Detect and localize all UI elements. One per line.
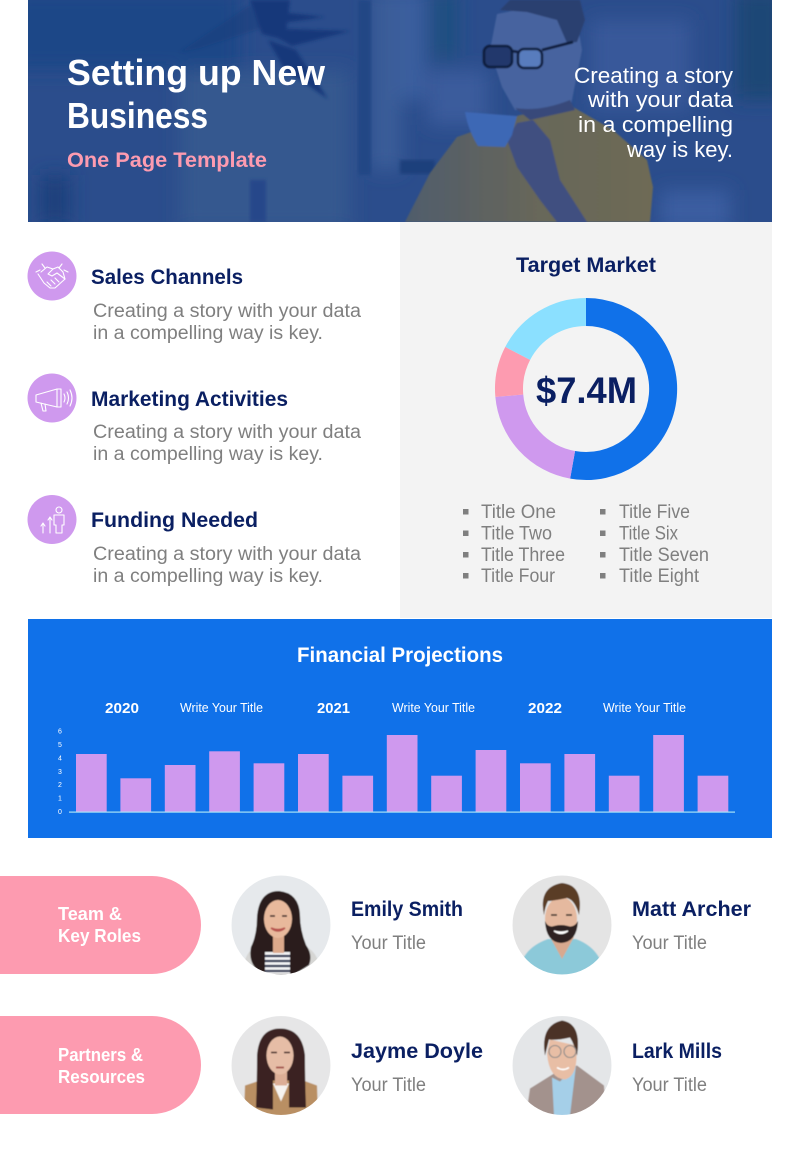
bar chart: 3 <box>58 769 62 776</box>
portrait: Matt Archer <box>512 875 612 975</box>
banner photo background <box>10 0 785 230</box>
pill: partners label: Resources <box>58 1067 145 1087</box>
portrait: Jayme Doyle <box>231 1016 331 1116</box>
pill: team label: Team & <box>58 904 122 924</box>
bar chart: 5 <box>58 742 62 749</box>
name: Emily Smith <box>351 898 463 954</box>
name: Lark Mills: Your Title <box>632 1075 707 1096</box>
banner title: Business <box>67 95 208 136</box>
year labels: 2021 <box>317 700 350 717</box>
legend: Title Two <box>481 524 552 544</box>
bar chart <box>58 728 735 816</box>
item: sales channels <box>28 252 361 344</box>
icon: person with arrows <box>28 495 76 544</box>
banner tagline: way is key. <box>626 137 733 162</box>
text: marketing activities: Creating a story with your data <box>93 422 361 443</box>
panel: financial projections <box>28 619 772 838</box>
text: funding needed: Creating a story with your data <box>93 544 361 565</box>
item: funding needed <box>28 495 361 587</box>
banner tagline: with your data <box>587 87 734 112</box>
donut chart <box>509 312 663 466</box>
panel: business items <box>28 252 361 587</box>
legend: Title Seven <box>619 545 709 566</box>
year labels: 2022 <box>528 700 562 717</box>
pill: team label <box>0 876 201 974</box>
heading: target market: Target Market <box>516 254 656 277</box>
pill: team label: Key Roles <box>58 926 141 946</box>
panel: target market <box>400 222 772 618</box>
bar chart: 1 <box>58 796 62 802</box>
banner tagline: in a compelling <box>578 112 733 137</box>
heading: funding needed: Funding Needed <box>91 509 258 532</box>
pill: partners label <box>0 1016 201 1114</box>
name: Lark Mills: Lark Mills <box>632 1040 722 1063</box>
name: Jayme Doyle: Jayme Doyle <box>351 1040 483 1063</box>
legend <box>463 502 709 587</box>
legend: Title Eight <box>619 566 700 587</box>
legend: Title Four <box>481 566 556 587</box>
legend: Title One <box>481 502 556 523</box>
banner tagline: Creating a story <box>574 63 733 88</box>
text: marketing activities: in a compelling way is key. <box>93 444 323 465</box>
text: funding needed: in a compelling way is key. <box>93 566 323 587</box>
heading: sales channels: Sales Channels <box>91 266 243 289</box>
item: marketing activities <box>28 374 361 465</box>
text: funding needed <box>93 544 361 587</box>
text: sales channels: in a compelling way is key. <box>93 323 323 344</box>
name: Jayme Doyle <box>351 1040 483 1096</box>
name: Emily Smith: Your Title <box>351 933 426 954</box>
year labels: Write Your Title <box>392 701 475 715</box>
icon: megaphone <box>28 374 76 422</box>
legend: Title Five <box>619 502 690 523</box>
icon: handshake <box>28 252 76 300</box>
legend: Title Six <box>619 524 678 544</box>
name: Matt Archer: Matt Archer <box>632 898 751 921</box>
heading: marketing activities: Marketing Activities <box>91 388 288 411</box>
banner tagline <box>574 63 734 162</box>
year labels: Write Your Title <box>603 701 686 715</box>
donut value: $7.4M <box>536 370 637 411</box>
legend: Title Three <box>481 545 565 566</box>
panel: team and key roles <box>0 875 751 975</box>
name: Lark Mills <box>632 1040 722 1096</box>
text: sales channels <box>93 301 361 344</box>
banner title: Setting up New <box>67 52 326 93</box>
bar chart: 6 <box>58 728 62 736</box>
panel: partners and resources <box>0 1016 722 1116</box>
pill: partners label: Partners & <box>58 1045 143 1065</box>
man with coffee cup <box>405 0 653 222</box>
bar chart: 2 <box>58 782 62 789</box>
year labels: 2020 <box>105 700 139 717</box>
header banner <box>10 0 785 230</box>
year labels <box>105 700 686 717</box>
portrait: Emily Smith <box>231 875 331 975</box>
bar chart: 0 <box>58 809 62 816</box>
bar chart: 4 <box>58 756 62 762</box>
plant leaves <box>244 0 347 98</box>
heading: financial projections: Financial Projections <box>297 644 503 667</box>
text: marketing activities <box>93 422 361 465</box>
name: Emily Smith: Emily Smith <box>351 898 463 921</box>
year labels: Write Your Title <box>180 701 263 715</box>
banner subtitle: One Page Template <box>67 149 267 172</box>
banner title <box>67 52 326 136</box>
text: sales channels: Creating a story with your data <box>93 301 361 322</box>
portrait: Lark Mills <box>512 1016 612 1116</box>
name: Matt Archer: Your Title <box>632 933 707 954</box>
name: Jayme Doyle: Your Title <box>351 1075 426 1096</box>
name: Matt Archer <box>632 898 751 954</box>
